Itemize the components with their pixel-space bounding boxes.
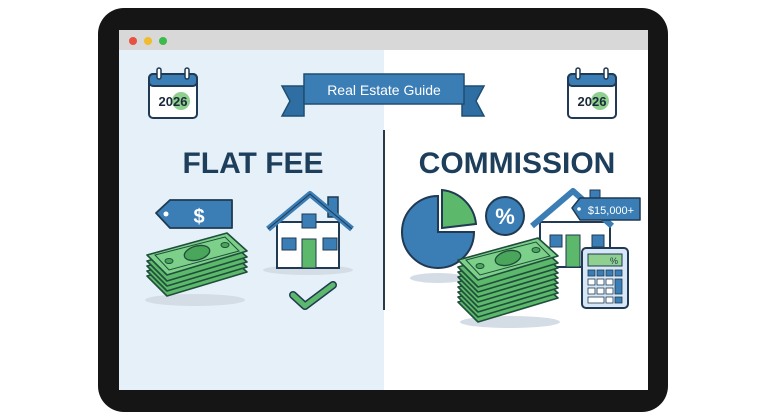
panel: flat fee background: [119, 50, 384, 390]
tablet frame: [98, 8, 668, 412]
browser titlebar: [119, 30, 648, 50]
banner: Real Estate Guide: Real Estate Guide: [327, 82, 441, 98]
icon: calendar left: [149, 68, 197, 118]
icon: calculator: %: [610, 256, 618, 266]
heading: COMMISSION: COMMISSION: [419, 147, 615, 180]
divider: [383, 130, 385, 310]
icon: price tag $15,000+: [572, 198, 640, 220]
icon: price tag $15,000+: $15,000+: [588, 205, 634, 217]
icon: price tag: $: [193, 206, 205, 228]
icon: calendar left: 2026: [159, 94, 187, 109]
icon: money stack right: [458, 238, 560, 328]
icon: percent badge: %: [495, 204, 515, 229]
icon: calculator: [582, 248, 628, 308]
icon: checkmark: [293, 285, 333, 306]
icon: price tag: [156, 200, 232, 228]
icon: calendar right: [568, 68, 616, 118]
icon: calendar right: 2026: [578, 94, 606, 109]
icon: percent badge: [486, 197, 524, 235]
heading: FLAT FEE: FLAT FEE: [182, 147, 324, 180]
icon: pie chart: [402, 190, 476, 283]
icon: money stack left: [145, 233, 247, 306]
icon: house left: [263, 194, 353, 275]
icon: house right: [532, 190, 612, 267]
banner: Real Estate Guide: [282, 74, 484, 116]
